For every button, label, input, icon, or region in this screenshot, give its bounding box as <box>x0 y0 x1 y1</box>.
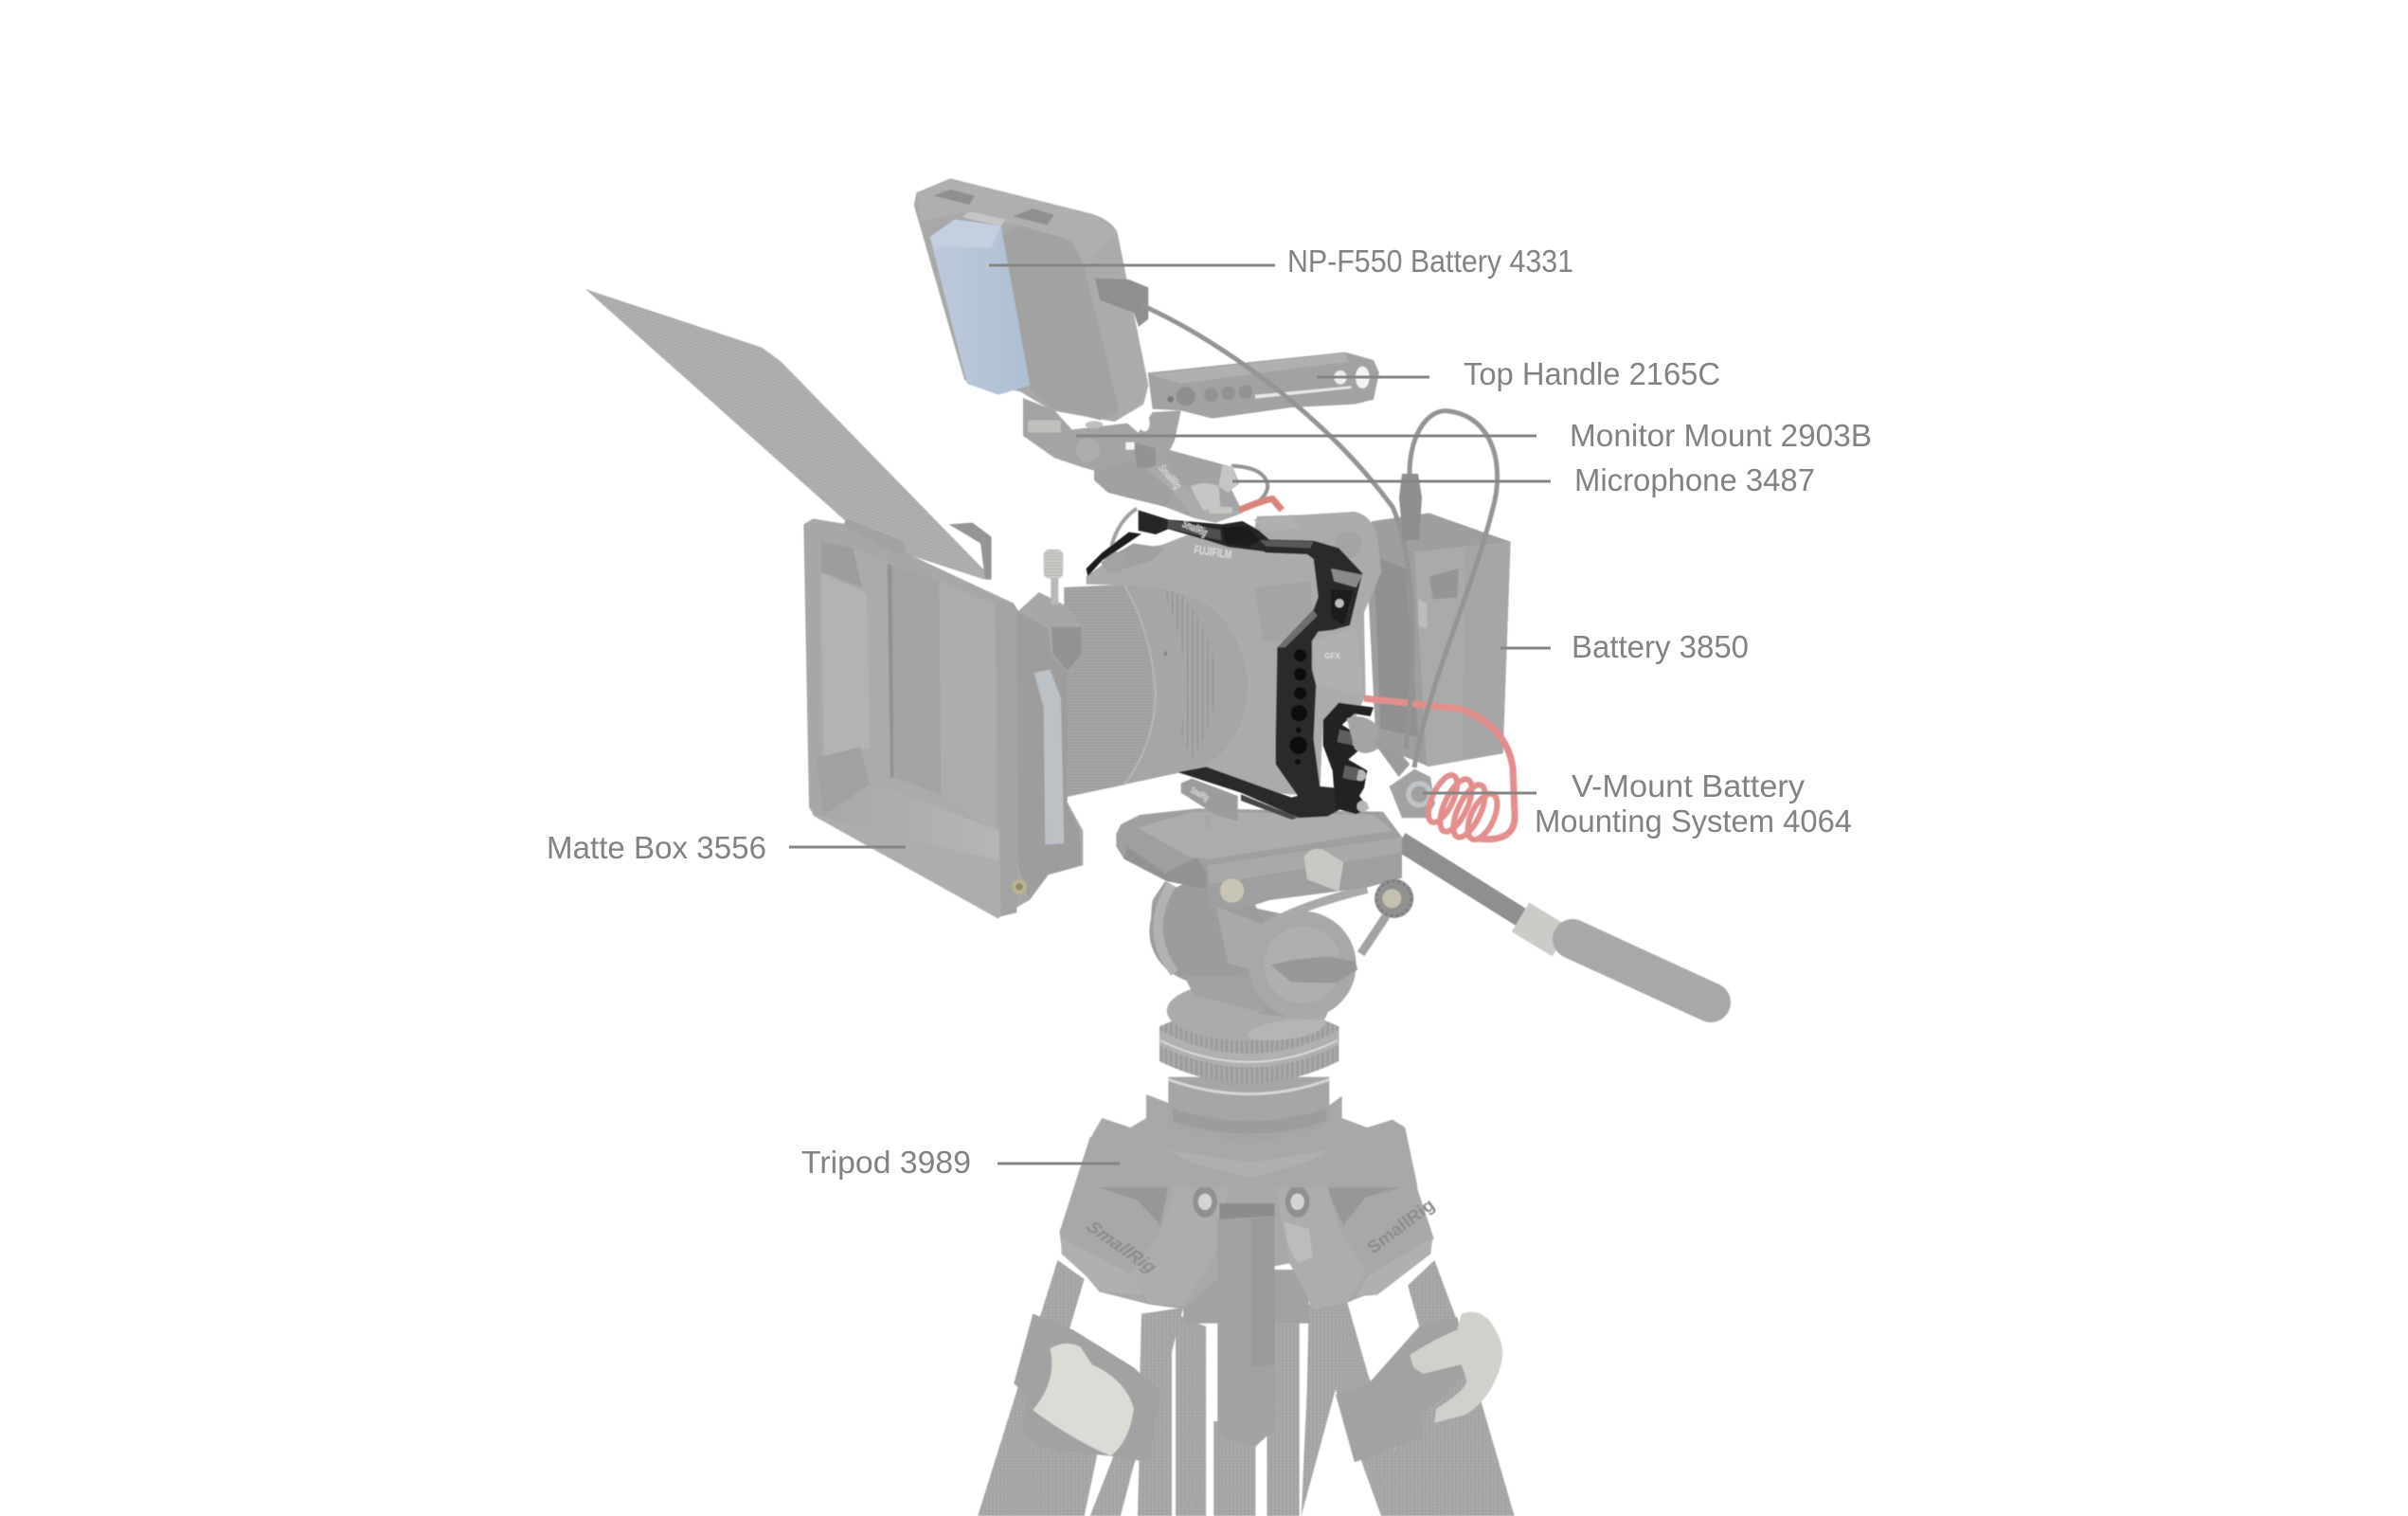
GFX logo: GFX <box>1324 652 1340 660</box>
callout: Microphone 3487: Microphone 3487 <box>1574 462 1815 497</box>
flag hinge and clip <box>843 518 992 580</box>
HDMI plug on monitor <box>1095 278 1148 327</box>
arri locating plate under cage <box>1181 779 1238 829</box>
monitor <box>914 178 1148 422</box>
cage: black camera cage <box>1087 509 1378 820</box>
callout: Top Handle 2165C: Top Handle 2165C <box>1464 356 1720 391</box>
pan handle rod, collar and grip <box>1400 841 1711 1002</box>
cage: black camera cage: SmallRig <box>1180 517 1210 539</box>
camera body <box>1087 512 1381 796</box>
lens barrel with focus ring <box>1064 585 1249 798</box>
rod clamp connector and knob <box>1374 736 1435 818</box>
tripod spider and centre column: SmallRig <box>1362 1197 1440 1257</box>
tripod spider and centre column: SmallRig <box>1082 1218 1160 1277</box>
microphone shoe mount: SmallRig <box>1156 462 1183 492</box>
callout: Matte Box 3556: Matte Box 3556 <box>547 830 766 865</box>
lens barrel with focus ring: 8 <box>1164 651 1168 658</box>
cold shoe side rail <box>1323 703 1374 814</box>
red coiled cable <box>1364 698 1515 844</box>
NP-F550 battery, blue <box>930 220 1030 395</box>
arri locating plate under cage: SmallRig <box>1189 785 1211 803</box>
top handle <box>1148 352 1379 419</box>
NATO clamp grey block <box>1347 716 1378 753</box>
callout: Tripod 3989: Tripod 3989 <box>801 1145 971 1180</box>
tripod spider and centre column <box>1060 1137 1440 1447</box>
fluid video head <box>1116 808 1413 1019</box>
callout: Monitor Mount 2903B: Monitor Mount 2903B <box>1570 418 1872 453</box>
microphone shoe mount <box>1146 450 1282 523</box>
matte box <box>803 518 1083 918</box>
FUJIFILM logo: FUJIFILM <box>1194 543 1232 562</box>
callout: Battery 3850: Battery 3850 <box>1572 629 1749 664</box>
monitor mount arm <box>1023 398 1243 523</box>
callout: V-Mount Battery Mounting System 4064: V-Mount Battery <box>1572 768 1806 803</box>
tripod legs <box>978 1260 1515 1516</box>
product photo: camera rig assembly <box>585 178 1711 1516</box>
callout: V-Mount Battery Mounting System 4064: Mounting System 4064 <box>1535 803 1852 839</box>
V-mount battery block <box>1366 513 1511 767</box>
cage mounting holes <box>1289 649 1307 765</box>
grey cable plug <box>1399 474 1422 540</box>
grey monitor and microphone cables <box>1141 305 1498 767</box>
tripod bowl neck and top of spider <box>1089 981 1418 1187</box>
tripod leg clamps and levers <box>1014 1312 1502 1462</box>
callout: NP-F550 Battery 4331: NP-F550 Battery 4331 <box>1287 244 1573 279</box>
matte box top flag <box>585 289 989 580</box>
callout: V-Mount Battery Mounting System 4064 <box>1423 768 1852 839</box>
